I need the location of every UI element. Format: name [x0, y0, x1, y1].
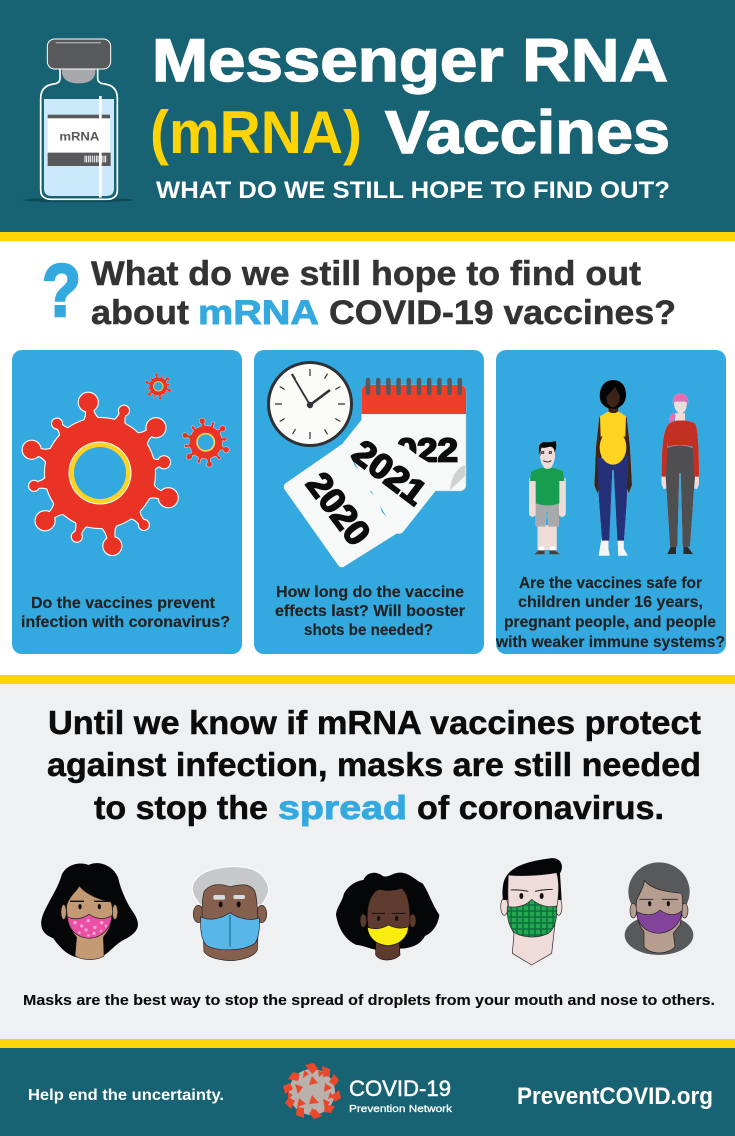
icon: calendar: 2022 [376, 432, 458, 468]
logo: COVID-19 Prevention Network: COVID-19 [349, 1076, 451, 1101]
panel: safety [495, 350, 726, 654]
mask caption: Masks are the best way to stop the spread of droplets from your mouth and nose to others. [23, 993, 715, 1009]
section heading: What do we still hope to find out [91, 255, 642, 293]
icon: small coronavirus [145, 373, 172, 400]
header band [0, 0, 735, 232]
logo icon: virus [283, 1063, 341, 1119]
calendar page: 2021: 2021 [344, 433, 433, 513]
caption: duration question: shots be needed? [304, 622, 433, 639]
face: woman with yellow mask [336, 873, 439, 960]
caption: safety question: with weaker immune systems? [495, 634, 725, 651]
section heading: about [91, 294, 190, 332]
face: man with green mask [501, 858, 562, 965]
mask message: against infection, masks are still needed [47, 747, 701, 784]
section heading: mRNA [198, 294, 319, 332]
figure: child [529, 441, 566, 554]
mask message [47, 705, 701, 827]
section heading [91, 255, 676, 332]
divider band: footer [0, 1039, 735, 1048]
face: woman with pink mask [41, 863, 138, 959]
mask message: to stop the [94, 790, 268, 827]
caption: infection question [21, 595, 230, 631]
panel: infection [12, 350, 242, 654]
figure: pregnant woman [594, 380, 632, 556]
title: (mRNA) [150, 99, 362, 166]
icon: clock [268, 362, 352, 446]
subtitle: WHAT DO WE STILL HOPE TO FIND OUT? [156, 177, 670, 204]
icon: question mark: ? [42, 249, 81, 332]
faces: right three [336, 858, 693, 965]
caption: safety question: children under 16 years, [518, 594, 703, 611]
face: person with purple mask [625, 862, 693, 955]
title: Messenger RNA [152, 27, 668, 94]
logo: COVID-19 Prevention Network: Prevention Network [349, 1103, 453, 1115]
caption: infection question: infection with coronavirus? [21, 614, 230, 631]
footer URL: PreventCOVID.org [517, 1083, 713, 1110]
figure: woman in red [662, 393, 699, 554]
icon: people group [529, 380, 699, 556]
calendar page: 2021 [343, 416, 446, 534]
title [150, 27, 670, 166]
icon: vaccine vial: mRNA [59, 130, 100, 144]
faces: left two [41, 863, 269, 961]
caption: infection question: Do the vaccines prevent [31, 595, 215, 612]
caption: duration question [275, 584, 465, 639]
icon: large coronavirus [20, 391, 181, 557]
logo: COVID-19 Prevention Network [283, 1063, 453, 1119]
icon: medium coronavirus [182, 418, 230, 467]
calendar page: 2020: 2020 [299, 465, 378, 553]
caption: safety question: Are the vaccines safe for [519, 575, 702, 592]
caption: duration question: How long do the vaccine [276, 584, 464, 601]
section heading: COVID-19 vaccines? [329, 294, 676, 332]
caption: duration question: effects last? Will booster [275, 603, 465, 620]
face: older man with blue mask [192, 867, 269, 961]
mask section background [0, 684, 735, 1039]
icon: calendar [362, 380, 466, 491]
footer band [0, 1048, 735, 1136]
mask message: Until we know if mRNA vaccines protect [48, 705, 701, 742]
caption: safety question [495, 575, 725, 651]
calendar page: 2020 [284, 443, 400, 567]
mask message: of coronavirus. [417, 790, 664, 827]
panel: duration [254, 350, 484, 654]
caption: safety question: pregnant people, and people [504, 614, 716, 631]
footer tagline: Help end the uncertainty. [28, 1087, 224, 1104]
icon: vaccine vial [23, 39, 133, 202]
mask message: spread [278, 790, 407, 827]
title: Vaccines [385, 99, 670, 166]
divider band: middle [0, 675, 735, 684]
divider band: header [0, 232, 735, 241]
